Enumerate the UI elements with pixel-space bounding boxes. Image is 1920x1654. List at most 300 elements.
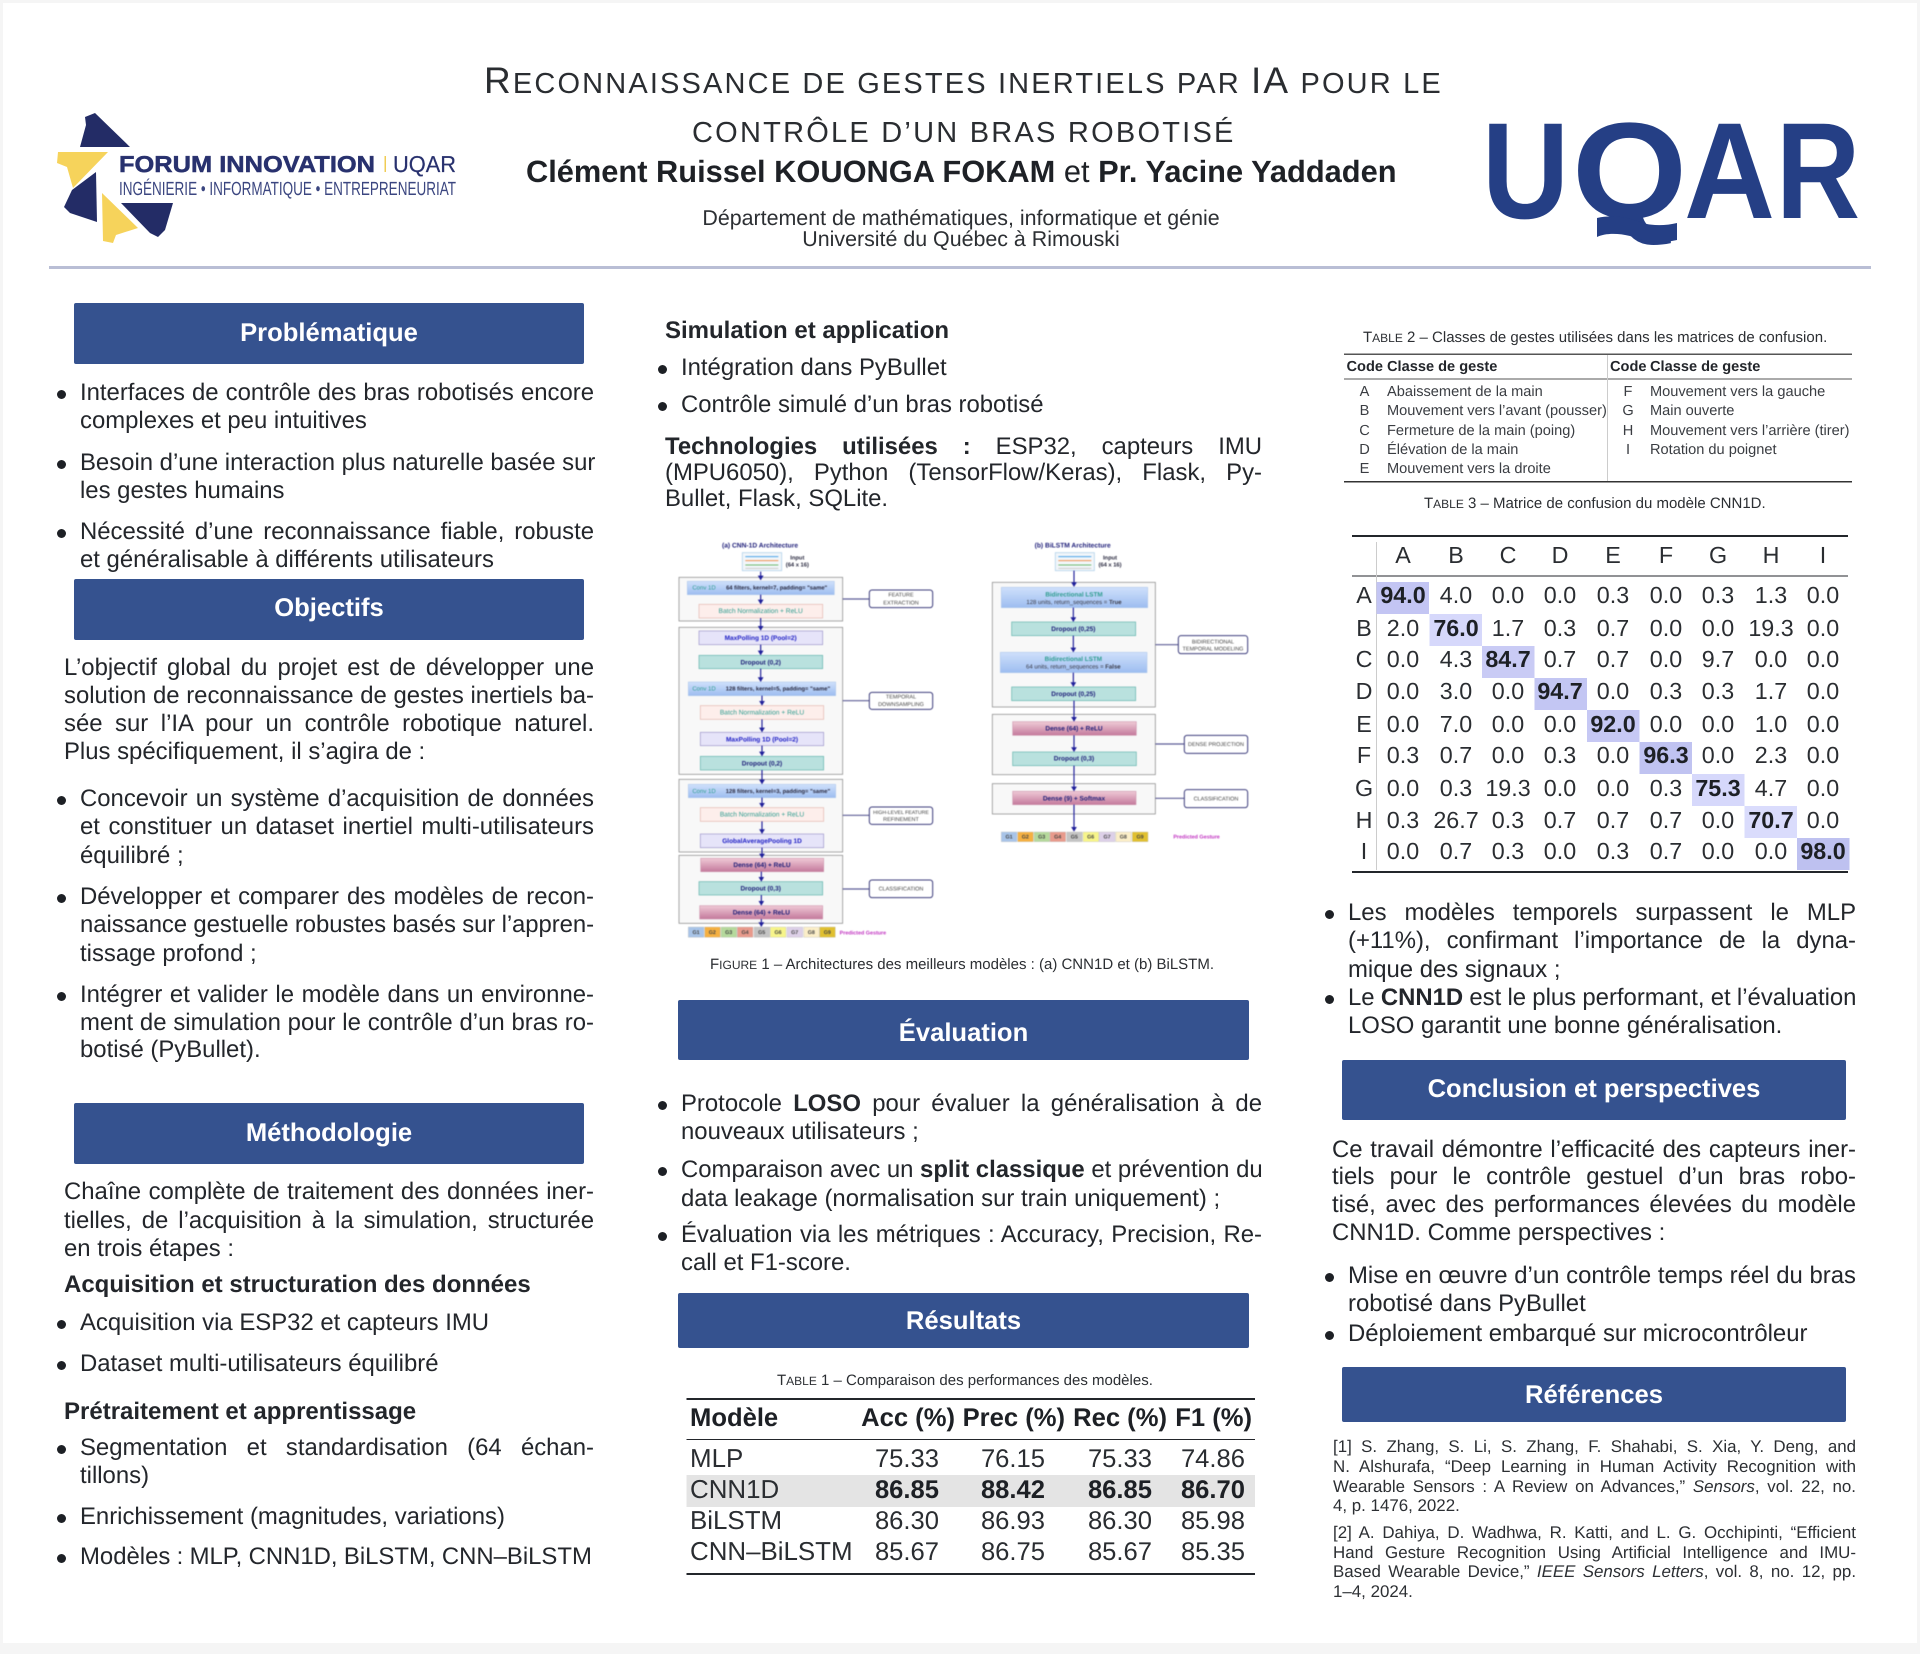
bullet: acquisition: et constituer un dataset inertiel multi-utilisateurs — [80, 813, 594, 840]
subheading: simulation: Simulation et application — [665, 317, 949, 344]
table 3: matrice de confusion: 94.0 — [1380, 582, 1426, 608]
reference 1: 4, p. 1476, 2022. — [1333, 1496, 1460, 1515]
diagram (a) CNN-1D: G4 — [741, 930, 749, 935]
diagram (a) CNN-1D: GlobalAveragePooling 1D — [722, 837, 802, 845]
figure: architectures — [678, 542, 1249, 973]
table 3: matrice de confusion: 4.0 — [1440, 582, 1472, 608]
table 1: Prec (%) — [963, 1404, 1065, 1432]
table 1: 86.85 — [1088, 1476, 1152, 1504]
table 3: matrice de confusion: G — [1709, 542, 1727, 568]
table 3: matrice de confusion: 0.3 — [1544, 742, 1576, 768]
reference 1 — [1333, 1437, 1856, 1517]
diagram (a) CNN-1D: DOWNSAMPLING — [878, 701, 924, 707]
bullet: LOSO — [658, 1090, 1262, 1145]
table 2: classes de gestes: Mouvement vers la gauche — [1650, 384, 1825, 400]
table 3: matrice de confusion: 0.0 — [1807, 582, 1839, 608]
table 1: 88.42 — [981, 1476, 1045, 1504]
heading: Méthodologie — [74, 1103, 584, 1164]
table 3: matrice de confusion: 0.0 — [1597, 775, 1629, 801]
diagram (a) CNN-1D: Predicted Gesture — [840, 930, 886, 936]
diagram (a) CNN-1D: Batch Normalization + ReLU — [720, 811, 804, 818]
diagram (a) CNN-1D: EXTRACTION — [883, 600, 919, 606]
table 3: matrice de confusion: D — [1356, 678, 1372, 704]
bullet: split classique — [658, 1156, 1263, 1212]
diagram (a) CNN-1D: FEATURE — [888, 592, 914, 598]
paragraph: objectif global: sée sur l’IA pour un contrôle robotique naturel. — [64, 710, 594, 737]
paragraph: conclusion: CNN1D. Comme perspectives : — [1332, 1219, 1665, 1246]
diagram (b) BiLSTM: (b) BiLSTM Architecture — [1035, 542, 1111, 549]
paragraph: objectif global: L’objectif global du projet est de développer une — [64, 654, 594, 681]
table 2: classes de gestes: A — [1360, 384, 1370, 400]
diagram (a) CNN-1D — [679, 542, 933, 937]
table 3: matrice de confusion: 0.0 — [1544, 838, 1576, 864]
table 3: matrice de confusion: 0.0 — [1387, 775, 1419, 801]
bullet: métriques: Évaluation via les métriques : Accuracy, Precision, Re- — [681, 1221, 1262, 1248]
table 3: matrice de confusion: 0.0 — [1702, 838, 1734, 864]
heading: Conclusion et perspectives — [1342, 1060, 1846, 1120]
diagram (b) BiLSTM: Dropout (0,25) — [1051, 690, 1095, 698]
heading: Conclusion et perspectives: Conclusion et perspectives — [1428, 1075, 1760, 1103]
table 3: matrice de confusion: 0.0 — [1544, 711, 1576, 737]
table 3: matrice de confusion: 0.0 — [1755, 838, 1787, 864]
title: RECONNAISSANCE DE GESTES INERTIELS PAR IA POUR LE — [484, 60, 1443, 101]
diagram (b) BiLSTM: TEMPORAL MODELING — [1183, 646, 1243, 652]
table 3: matrice de confusion: E — [1605, 542, 1621, 568]
affiliation: Université du Québec à Rimouski — [802, 227, 1120, 251]
table 1: 75.33 — [875, 1445, 939, 1473]
diagram (a) CNN-1D: 64 filters, kernel=7, padding= "same" — [726, 584, 827, 591]
table 3: matrice de confusion: 0.0 — [1807, 711, 1839, 737]
table 2: classes de gestes: Fermeture de la main (poing) — [1387, 423, 1575, 439]
table 2: classes de gestes: F — [1624, 384, 1633, 400]
table 2: classes de gestes: G — [1622, 403, 1634, 419]
paragraph: objectif global: Plus spécifiquement, il s’agira de : — [64, 738, 425, 765]
diagram (b) BiLSTM: Dropout (0,3) — [1054, 755, 1094, 762]
table 1: MLP — [690, 1445, 743, 1473]
bullet: enrichissement: Enrichissement (magnitudes, variations) — [80, 1503, 505, 1530]
table 2: classes de gestes — [1344, 329, 1852, 482]
bullet: simulation: ment de simulation pour le contrôle d’un bras ro- — [80, 1009, 594, 1036]
table 3: matrice de confusion: 0.3 — [1702, 678, 1734, 704]
bullet: simulation: Intégrer et valider le modèle dans un environne- — [80, 981, 594, 1008]
bullet: interaction — [57, 449, 595, 504]
table 1: 86.75 — [981, 1538, 1045, 1566]
heading: Références — [1342, 1367, 1846, 1422]
subheading: prétraitement: Prétraitement et apprentissage — [64, 1398, 416, 1425]
panel: Problématique — [57, 303, 595, 573]
bullet: reconnaissance — [57, 518, 594, 573]
diagram (b) BiLSTM: Bidirectional LSTM — [1045, 591, 1103, 598]
table 3: matrice de confusion: 94.7 — [1537, 678, 1583, 704]
table 3: matrice de confusion: A — [1395, 542, 1411, 568]
paragraph: technologies: Bullet, Flask, SQLite. — [665, 485, 888, 512]
logo: UQAR: Q — [1572, 95, 1687, 248]
table 3: matrice de confusion: 0.0 — [1492, 742, 1524, 768]
table 3: matrice de confusion: 0.0 — [1387, 678, 1419, 704]
bullet: interfaces — [57, 379, 594, 434]
diagram (a) CNN-1D: TEMPORAL — [886, 694, 916, 700]
table 3: matrice de confusion: 1.7 — [1755, 678, 1787, 704]
paragraph: conclusion — [1332, 1135, 1856, 1247]
bullet: métriques: call et F1-score. — [681, 1249, 851, 1276]
diagram (b) BiLSTM: Predicted Gesture — [1173, 834, 1220, 840]
table 3: matrice de confusion: 0.7 — [1650, 838, 1682, 864]
table 3: matrice de confusion: F — [1357, 742, 1371, 768]
table 2: classes de gestes: TABLE 2 – Classes de gestes utilisées dans les matrices de confusion. — [1363, 329, 1827, 346]
table 3: matrice de confusion: 0.0 — [1387, 711, 1419, 737]
bullet: interfaces: complexes et peu intuitives — [80, 407, 367, 434]
table 2: classes de gestes: H — [1623, 423, 1633, 439]
diagram (b) BiLSTM: 128 units, return_sequences = True — [1026, 599, 1122, 605]
table 3: matrice de confusion: B — [1448, 542, 1464, 568]
table 3: matrice de confusion: F — [1659, 542, 1673, 568]
paragraph: chaîne complète — [64, 1178, 594, 1262]
table 3: matrice de confusion: 0.0 — [1544, 582, 1576, 608]
authors: Clément Ruissel KOUONGA FOKAM et Pr. Yacine Yaddaden — [526, 154, 1397, 189]
table 3: matrice de confusion: 9.7 — [1702, 646, 1734, 672]
table 3: matrice de confusion: 0.3 — [1702, 582, 1734, 608]
table 3: matrice de confusion: G — [1355, 775, 1373, 801]
paragraph: objectif global — [64, 654, 594, 765]
diagram (a) CNN-1D: G2 — [709, 930, 716, 935]
bullet: modèles temporels: Les modèles temporels surpassent le MLP — [1348, 899, 1856, 926]
diagram (b) BiLSTM: G7 — [1103, 834, 1111, 840]
table 3: matrice de confusion: 0.3 — [1597, 838, 1629, 864]
panel: Objectifs — [57, 579, 594, 1063]
logo: UQAR: U — [1482, 95, 1569, 248]
table 3: matrice de confusion: 0.7 — [1597, 615, 1629, 641]
table 3: matrice de confusion: 0.7 — [1440, 838, 1472, 864]
reference 2: 1–4, 2024. — [1333, 1582, 1413, 1601]
table 3: matrice de confusion: 0.3 — [1597, 582, 1629, 608]
diagram (a) CNN-1D: Conv 1D — [692, 584, 716, 591]
table 2: classes de gestes: I — [1626, 442, 1630, 458]
table 3: matrice de confusion: 0.0 — [1702, 742, 1734, 768]
bullet: modèles temporels — [1348, 898, 1856, 983]
reference 2: [2] A. Dahiya, D. Wadhwa, R. Katti, and L. G. Occhipinti, “Efficient — [1333, 1523, 1856, 1542]
table 3: matrice de confusion: 19.3 — [1485, 775, 1531, 801]
table 1 — [686, 1372, 1255, 1575]
table 3: matrice de confusion: 1.3 — [1755, 582, 1787, 608]
table 3: matrice de confusion: 0.7 — [1544, 807, 1576, 833]
table 3: matrice de confusion: 0.3 — [1492, 838, 1524, 864]
diagram (a) CNN-1D: REFINEMENT — [883, 816, 919, 822]
reference 1: N. Alshurafa, “Deep Learning in Human Activity Recognition with — [1333, 1457, 1856, 1476]
reference 1: [1] S. Zhang, S. Li, S. Zhang, F. Shahabi, S. Xia, Y. Deng, and — [1333, 1437, 1856, 1456]
logo: UQAR — [1482, 95, 1860, 248]
diagram (b) BiLSTM: CLASSIFICATION — [1194, 796, 1238, 802]
table 3: matrice de confusion: C — [1500, 542, 1516, 568]
diagram (b) BiLSTM: G4 — [1054, 834, 1061, 840]
table 1: 75.33 — [1088, 1445, 1152, 1473]
table 3: matrice de confusion: 0.0 — [1807, 807, 1839, 833]
diagram (a) CNN-1D: Dropout (0,3) — [740, 885, 781, 892]
table 2: classes de gestes: D — [1359, 442, 1370, 458]
heading: Évaluation — [678, 1000, 1249, 1060]
table 2: classes de gestes: Code — [1346, 359, 1383, 375]
diagram (a) CNN-1D: Batch Normalization + ReLU — [720, 709, 804, 716]
table 3: matrice de confusion: 76.0 — [1433, 615, 1479, 641]
table 1: 74.86 — [1181, 1445, 1245, 1473]
table 1: TABLE 1 – Comparaison des performances des modèles. — [777, 1372, 1153, 1389]
table 1: 86.70 — [1181, 1476, 1245, 1504]
diagram (a) CNN-1D: Batch Normalization + ReLU — [719, 607, 803, 615]
diagram (a) CNN-1D: Dense (64) + ReLU — [733, 909, 790, 916]
table 2: classes de gestes: E — [1360, 461, 1370, 477]
table 3: matrice de confusion: 0.3 — [1492, 807, 1524, 833]
table 3: matrice de confusion: 0.0 — [1755, 646, 1787, 672]
table 3: matrice de confusion: 0.0 — [1387, 838, 1419, 864]
bullet: contrôle simulé: Contrôle simulé d’un bras robotisé — [681, 391, 1044, 418]
table 3: matrice de confusion: E — [1356, 711, 1372, 737]
bullet: modèles: tissage profond ; — [80, 940, 257, 967]
table 3: matrice de confusion: 1.0 — [1755, 711, 1787, 737]
diagram (b) BiLSTM: Dense (64) + ReLU — [1045, 725, 1103, 732]
logo: Forum Innovation UQAR: UQAR — [393, 151, 456, 177]
diagram (b) BiLSTM: DENSE PROJECTION — [1188, 741, 1244, 747]
diagram (a) CNN-1D: MaxPolling 1D (Pool=2) — [726, 736, 798, 743]
table 3: matrice de confusion: 1.7 — [1492, 615, 1524, 641]
diagram (a) CNN-1D: G7 — [791, 930, 798, 935]
paragraph: technologies: (MPU6050), Python (TensorFlow/Keras), Flask, Py- — [665, 459, 1262, 486]
table 1: Modèle — [690, 1404, 778, 1432]
diagram (b) BiLSTM: G8 — [1120, 834, 1127, 840]
diagram (b) BiLSTM: Dense (9) + Softmax — [1043, 795, 1105, 802]
bullet: CNN1D: Le CNN1D est le plus performant, et l’évaluation — [1348, 984, 1856, 1011]
table 2: classes de gestes: Classe de geste — [1387, 359, 1497, 375]
table 3: matrice de confusion: H — [1763, 542, 1779, 568]
bullet: temps réel: robotisé dans PyBullet — [1348, 1290, 1586, 1317]
heading: Évaluation: Évaluation — [899, 1019, 1028, 1047]
table 3: matrice de confusion: 0.7 — [1597, 646, 1629, 672]
table 3: matrice de confusion: D — [1552, 542, 1568, 568]
heading: Problématique — [74, 303, 584, 364]
table 3: matrice de confusion: 92.0 — [1590, 711, 1636, 737]
table 2: classes de gestes: Code — [1610, 359, 1646, 375]
table 3: matrice de confusion: TABLE 3 – Matrice de confusion du modèle CNN1D. — [1424, 495, 1766, 512]
table 3: matrice de confusion: 0.7 — [1440, 742, 1472, 768]
bullet: modèles temporels: mique des signaux ; — [1348, 956, 1560, 983]
bullet: LOSO: nouveaux utilisateurs ; — [681, 1118, 919, 1145]
table 3: matrice de confusion: 96.3 — [1643, 742, 1689, 768]
table 1: 86.30 — [1088, 1507, 1152, 1535]
affiliation: Département de mathématiques, informatique et génie — [702, 206, 1220, 230]
diagram (b) BiLSTM: 64 units, return_sequences = False — [1026, 663, 1121, 670]
logo: Forum Innovation UQAR: FORUM INNOVATION — [119, 151, 375, 177]
logo: UQAR: A — [1684, 95, 1775, 248]
table 2: classes de gestes: Mouvement vers l’avant (pousser) — [1387, 403, 1607, 419]
diagram (b) BiLSTM: Bidirectional LSTM — [1045, 656, 1102, 663]
panel: simulation et technologies — [658, 317, 1262, 512]
table 3: matrice de confusion: 3.0 — [1440, 678, 1472, 704]
bullet: segmentation — [57, 1434, 594, 1489]
table 3: matrice de confusion: 98.0 — [1800, 838, 1846, 864]
table 2: classes de gestes: Mouvement vers l’arrière (tirer) — [1650, 423, 1850, 439]
table 3: matrice de confusion: 0.7 — [1650, 807, 1682, 833]
table 3: matrice de confusion: 0.7 — [1544, 646, 1576, 672]
panel: Références — [1325, 1364, 1860, 1609]
diagram (a) CNN-1D: G3 — [725, 930, 732, 935]
table 3: matrice de confusion: 0.3 — [1650, 775, 1682, 801]
bullet: interfaces: Interfaces de contrôle des bras robotisés encore — [80, 379, 594, 406]
bullet: segmentation: tillons) — [80, 1462, 149, 1489]
logo: Forum Innovation UQAR — [57, 113, 456, 243]
diagram (a) CNN-1D: Dropout (0,2) — [740, 659, 781, 666]
diagrams — [678, 542, 1249, 938]
diagram (b) BiLSTM: G9 — [1136, 834, 1144, 840]
table 3: matrice de confusion: 0.0 — [1387, 646, 1419, 672]
diagram (b) BiLSTM: (64 x 16) — [1098, 561, 1122, 568]
paragraph: technologies — [665, 433, 1262, 512]
table 3: matrice de confusion: C — [1356, 646, 1372, 672]
paragraph: chaîne complète: Chaîne complète de traitement des données iner- — [64, 1178, 594, 1205]
diagram (a) CNN-1D: 128 filters, kernel=5, padding= "same" — [726, 685, 830, 692]
panel: Évaluation — [658, 1000, 1263, 1276]
bullet: interaction: les gestes humains — [80, 477, 285, 504]
heading: Objectifs: Objectifs — [274, 594, 384, 622]
paragraph: conclusion: tiels pour le contrôle gestuel d’un bras robo- — [1332, 1163, 1856, 1190]
heading: Références: Références — [1525, 1381, 1663, 1409]
heading: Objectifs — [74, 579, 584, 640]
bullet: simulation: botisé (PyBullet). — [80, 1036, 261, 1063]
diagram (a) CNN-1D: 128 filters, kernel=3, padding= "same" — [726, 788, 830, 794]
table 3: matrice de confusion: 0.0 — [1650, 711, 1682, 737]
table 2: classes de gestes: Main ouverte — [1650, 403, 1734, 419]
table 2: classes de gestes: Classe de geste — [1650, 359, 1760, 375]
table 3: matrice de confusion: 7.0 — [1440, 711, 1472, 737]
diagram (b) BiLSTM: Dropout (0,25) — [1051, 625, 1095, 633]
table 1: 86.85 — [875, 1476, 939, 1504]
diagram (a) CNN-1D: G8 — [808, 930, 815, 935]
title: CONTRÔLE D’UN BRAS ROBOTISÉ — [692, 117, 1236, 149]
diagram (a) CNN-1D: Conv 1D — [692, 685, 716, 692]
bullet: interaction: Besoin d’une interaction plus naturelle basée sur — [80, 449, 595, 476]
diagram (a) CNN-1D: (64 x 16) — [786, 561, 809, 568]
table 3: matrice de confusion: 0.0 — [1492, 582, 1524, 608]
table 3: matrice de confusion: 84.7 — [1485, 646, 1531, 672]
table 3: matrice de confusion: 0.0 — [1492, 711, 1524, 737]
bullet: reconnaissance: et généralisable à différents utilisateurs — [80, 546, 494, 573]
table 3: matrice de confusion: 0.3 — [1544, 615, 1576, 641]
bullet: PyBullet: Intégration dans PyBullet — [681, 354, 947, 381]
title — [484, 60, 1443, 149]
bullet: temps réel: Mise en œuvre d’un contrôle temps réel du bras — [1348, 1262, 1856, 1289]
table 3: matrice de confusion: 0.0 — [1807, 646, 1839, 672]
reference 2 — [1333, 1523, 1856, 1603]
diagram (b) BiLSTM: G1 — [1005, 834, 1013, 840]
table 1: Rec (%) — [1073, 1404, 1167, 1432]
subheading: acquisition: Acquisition et structuration des données — [64, 1271, 531, 1298]
table 3: matrice de confusion: 0.0 — [1807, 742, 1839, 768]
paragraph: chaîne complète: en trois étapes : — [64, 1235, 234, 1262]
diagram (b) BiLSTM: G6 — [1087, 834, 1094, 840]
diagram (a) CNN-1D: Dropout (0,2) — [742, 760, 782, 767]
table 3: matrice de confusion: 0.0 — [1807, 615, 1839, 641]
table 3: matrice de confusion: 0.0 — [1807, 678, 1839, 704]
bullet: dataset: Dataset multi-utilisateurs équilibré — [80, 1350, 439, 1377]
bullet: modèles temporels: (+11%), confirmant l’importance de la dyna- — [1348, 927, 1856, 954]
table 3: matrice de confusion: B — [1356, 615, 1372, 641]
table 3: matrice de confusion: 0.7 — [1597, 807, 1629, 833]
diagram (a) CNN-1D: Input — [790, 554, 804, 561]
affiliation — [702, 206, 1220, 251]
bullet: split classique: Comparaison avec un split classique et prévention du — [681, 1156, 1263, 1183]
table 3: matrice de confusion: H — [1356, 807, 1372, 833]
bullet: temps réel — [1348, 1261, 1856, 1317]
table 2: classes de gestes: Abaissement de la main — [1387, 384, 1543, 400]
panel: analyse des résultats — [1325, 895, 1860, 1045]
diagram (a) CNN-1D: (a) CNN-1D Architecture — [722, 542, 798, 549]
bullet: déploiement: Déploiement embarqué sur microcontrôleur — [1348, 1320, 1807, 1347]
diagram (a) CNN-1D: CLASSIFICATION — [879, 886, 923, 892]
bullet: modèles testés: Modèles : MLP, CNN1D, BiLSTM, CNN–BiLSTM — [80, 1543, 592, 1570]
bullet: acquisition — [57, 785, 594, 869]
heading: Résultats: Résultats — [906, 1307, 1021, 1335]
table 3: matrice de confusion: 4.3 — [1440, 646, 1472, 672]
table 3: matrice de confusion: 0.0 — [1702, 615, 1734, 641]
diagram (a) CNN-1D: G9 — [824, 930, 831, 935]
paragraph: conclusion: tisé, avec des performances élevées du modèle — [1332, 1191, 1856, 1218]
table 1: 85.67 — [1088, 1538, 1152, 1566]
table 3: matrice de confusion: 0.0 — [1597, 678, 1629, 704]
diagram (b) BiLSTM: G5 — [1071, 834, 1078, 840]
bullet: LOSO: Protocole LOSO pour évaluer la généralisation à de — [681, 1090, 1262, 1117]
table 1: 85.35 — [1181, 1538, 1245, 1566]
table 3: matrice de confusion: 0.0 — [1650, 615, 1682, 641]
diagram (a) CNN-1D: Dense (64) + ReLU — [733, 861, 791, 869]
bullet: acquisition: Concevoir un système d’acquisition de données — [80, 785, 594, 812]
table 3: matrice de confusion: 0.0 — [1492, 678, 1524, 704]
diagram (a) CNN-1D: Conv 1D — [692, 788, 716, 794]
table 2: classes de gestes: B — [1360, 403, 1369, 419]
bullet: ESP32: Acquisition via ESP32 et capteurs IMU — [80, 1309, 489, 1336]
diagram (b) BiLSTM: BIDIRECTIONAL — [1192, 639, 1234, 645]
bullet: acquisition: équilibré ; — [80, 842, 184, 869]
diagram (a) CNN-1D: G6 — [774, 930, 782, 935]
table 3: matrice de confusion: 0.0 — [1597, 742, 1629, 768]
heading: Problématique: Problématique — [240, 319, 418, 347]
paragraph: conclusion: Ce travail démontre l’efficacité des capteurs iner- — [1332, 1136, 1856, 1163]
bullet: CNN1D — [1348, 983, 1856, 1039]
table 3: matrice de confusion: 2.0 — [1387, 615, 1419, 641]
paragraph: technologies: Technologies utilisées : ESP32, capteurs IMU — [665, 433, 1262, 460]
bullet: reconnaissance: Nécessité d’une reconnaissance fiable, robuste — [80, 518, 594, 545]
panel: Résultats — [678, 1293, 1255, 1575]
table 1: BiLSTM — [690, 1507, 782, 1535]
figure caption: FIGURE 1 – Architectures des meilleurs modèles : (a) CNN1D et (b) BiLSTM. — [710, 956, 1214, 973]
table 1: F1 (%) — [1175, 1404, 1252, 1432]
logo: Forum Innovation UQAR: INGÉNIERIE • INFORMATIQUE • ENTREPRENEURIAT — [119, 178, 456, 200]
bullet: segmentation: Segmentation et standardisation (64 échan- — [80, 1434, 594, 1461]
table 3: matrice de confusion: 19.3 — [1748, 615, 1794, 641]
table 1: Acc (%) — [861, 1404, 955, 1432]
table 3: matrice de confusion: I — [1820, 542, 1826, 568]
bullet: modèles: Développer et comparer des modèles de recon- — [80, 883, 594, 910]
table 3: matrice de confusion: 0.0 — [1702, 807, 1734, 833]
table 2: classes de gestes: Mouvement vers la droite — [1387, 461, 1551, 477]
table 1: 85.67 — [875, 1538, 939, 1566]
bullet: split classique: data leakage (normalisation sur train uniquement) ; — [681, 1185, 1220, 1212]
table 2: classes de gestes: Rotation du poignet — [1650, 442, 1777, 458]
table 2: classes de gestes: C — [1359, 423, 1370, 439]
table 1: CNN–BiLSTM — [690, 1538, 853, 1566]
table 3: matrice de confusion: 0.0 — [1702, 711, 1734, 737]
panel: Conclusion et perspectives — [1325, 1056, 1860, 1361]
table 3: matrice de confusion: 75.3 — [1695, 775, 1741, 801]
bullet: modèles — [57, 883, 594, 967]
bullet: métriques — [658, 1221, 1262, 1276]
diagram (a) CNN-1D: G1 — [692, 930, 700, 935]
